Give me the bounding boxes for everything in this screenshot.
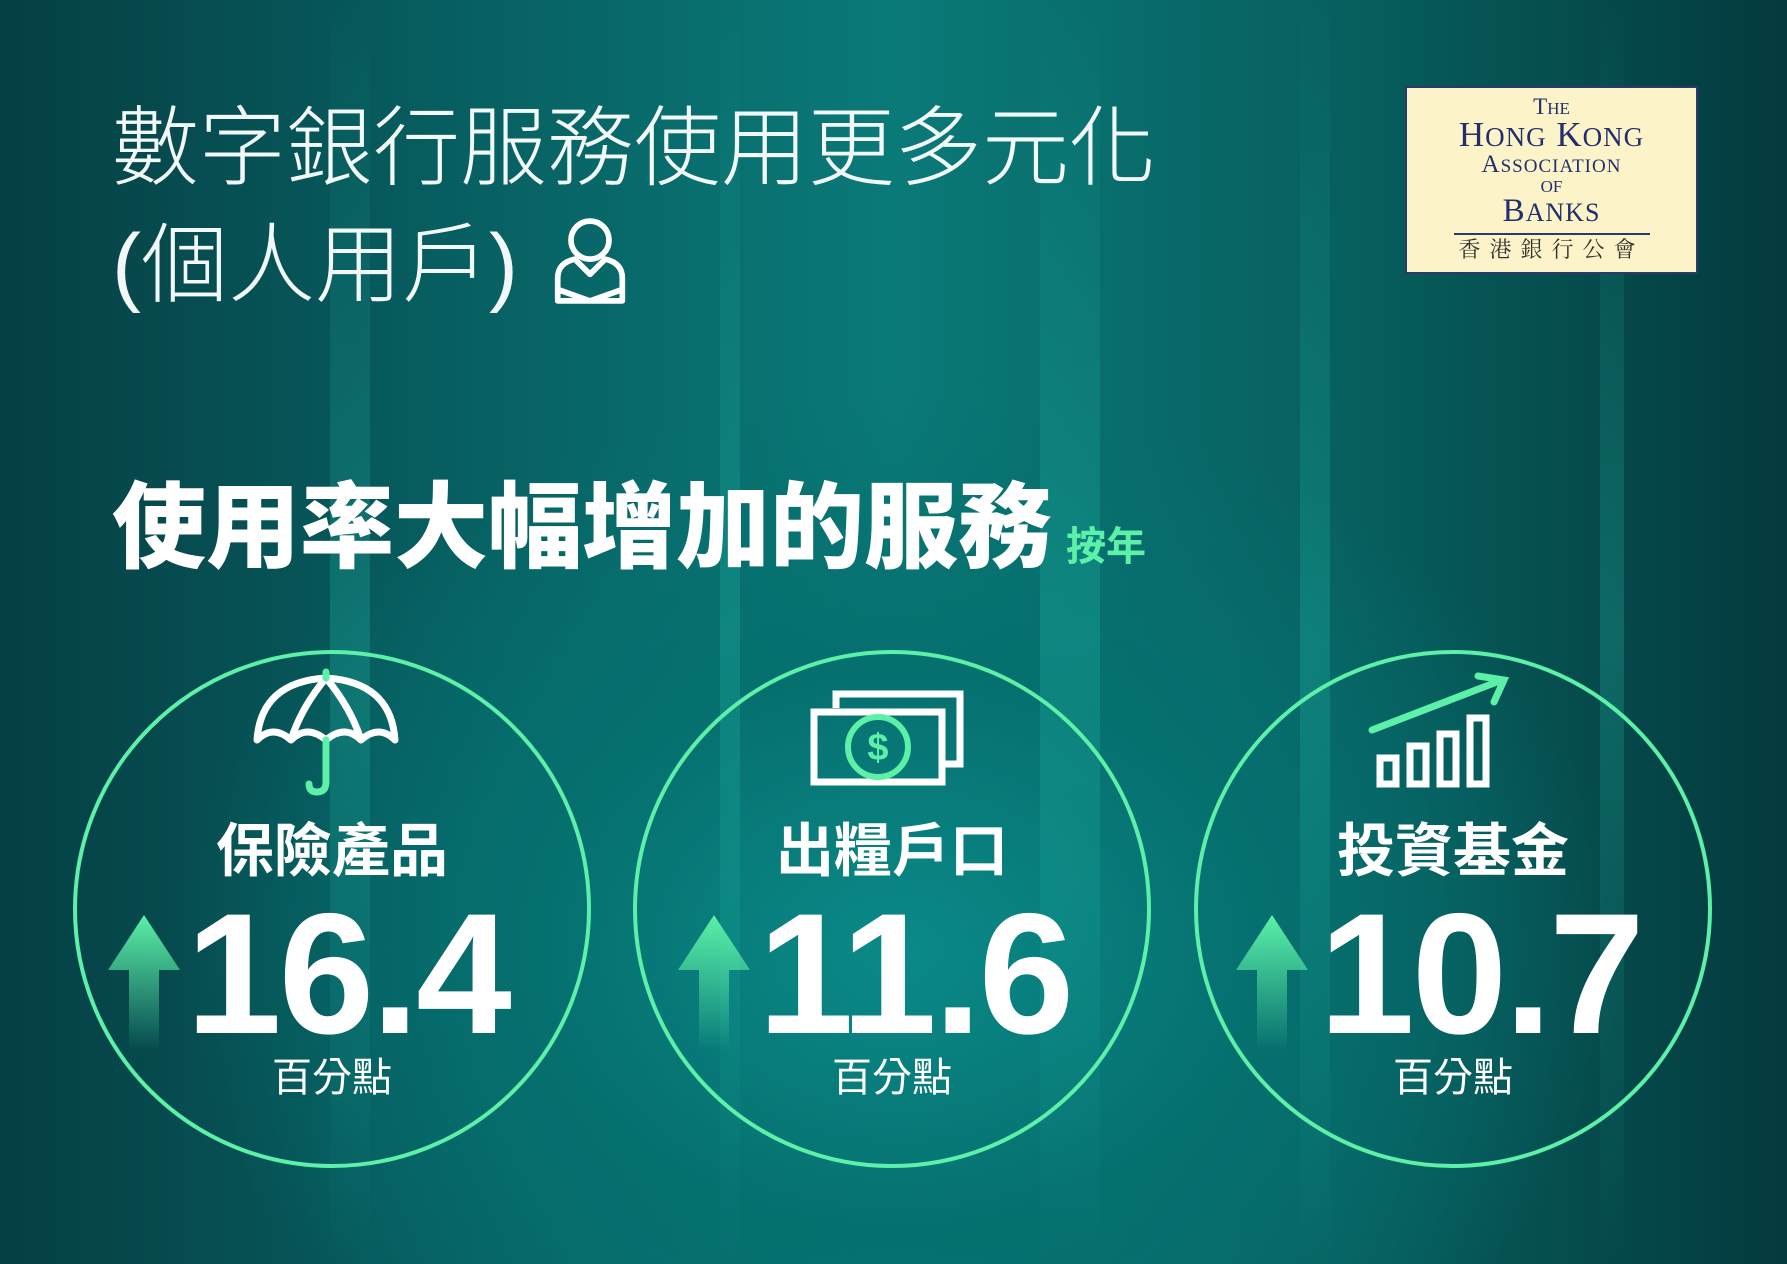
icon: money <box>810 690 964 786</box>
label: 投資基金 <box>1337 819 1569 884</box>
icon: money: $ <box>867 727 889 769</box>
panel: funds <box>1194 650 1712 1168</box>
arrow <box>108 915 180 1044</box>
logo: OF <box>1541 177 1562 196</box>
icon: person <box>554 218 626 304</box>
logo: 香港銀行公會 <box>1458 237 1644 262</box>
label: 保險產品 <box>216 819 448 884</box>
icon: growth chart <box>1368 672 1509 788</box>
number: 11.6 <box>758 878 1071 1070</box>
unit: 百分點 <box>832 1056 952 1100</box>
unit: 百分點 <box>272 1056 392 1100</box>
number: 10.7 <box>1319 878 1642 1070</box>
title <box>112 100 1156 314</box>
logo: BANKS <box>1503 193 1600 229</box>
panel: remittance <box>633 650 1151 1168</box>
number: 16.4 <box>186 878 509 1070</box>
title: 數字銀行服務使用更多元化 <box>112 100 1156 197</box>
logo: ASSOCIATION <box>1482 151 1621 178</box>
logo <box>1405 86 1698 274</box>
arrow <box>1236 915 1308 1042</box>
logo: THE <box>1533 94 1570 119</box>
label: 出糧戶口 <box>776 819 1008 884</box>
icon: umbrella <box>254 668 398 796</box>
panel: insurance <box>73 650 591 1168</box>
subheading: 使用率大幅增加的服務 按年 <box>112 475 1146 580</box>
unit: 百分點 <box>1393 1056 1513 1100</box>
arrow <box>678 915 750 1040</box>
title: (個人用戶) <box>112 217 518 314</box>
logo: HONG KONG <box>1459 115 1644 154</box>
